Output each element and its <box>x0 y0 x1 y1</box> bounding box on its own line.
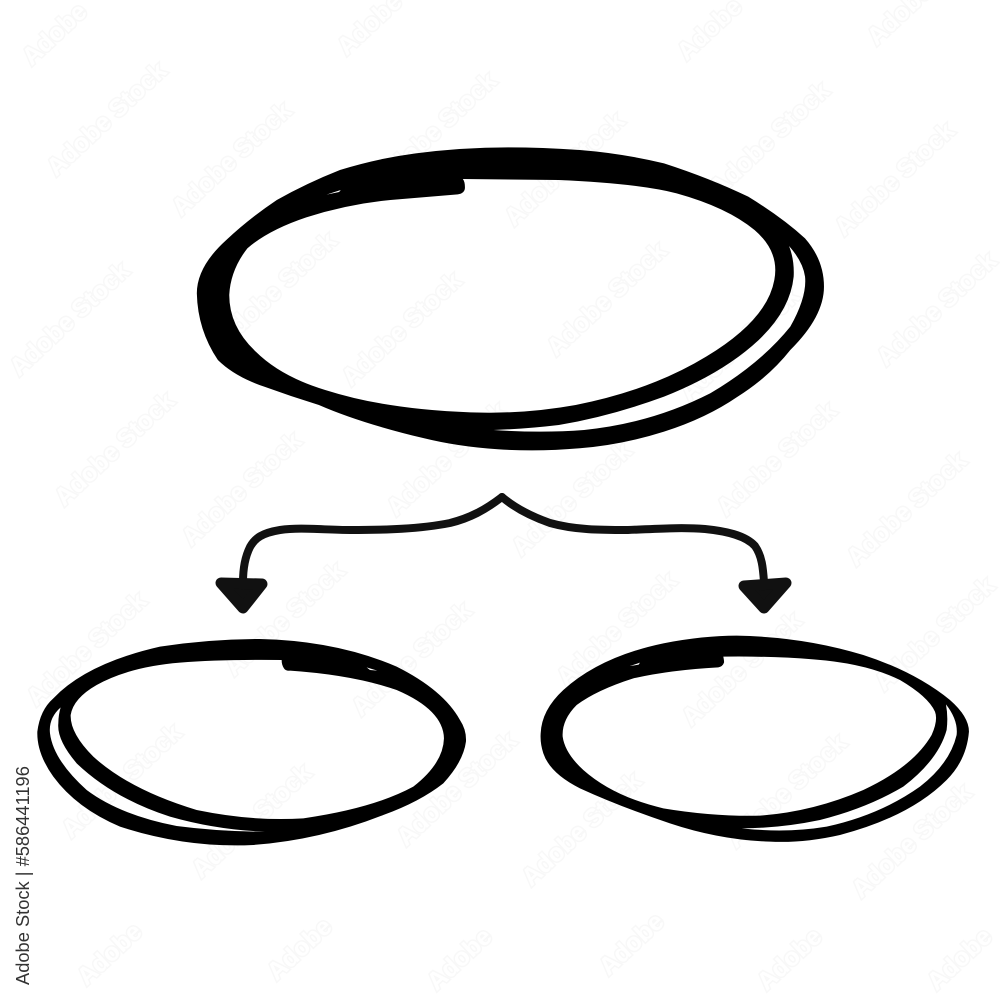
watermark text: Adobe Stock <box>381 397 512 521</box>
watermark text: Adobe Stock <box>704 77 835 201</box>
watermark text: Adobe Stock <box>336 267 467 391</box>
watermark text: Adobe Stock <box>846 779 977 903</box>
watermark text: Adobe Stock <box>674 282 805 406</box>
watermark text: Adobe <box>594 907 670 981</box>
watermark text: Adobe Stock <box>56 719 187 843</box>
watermark text: Adobe Stock <box>841 447 972 571</box>
watermark text: Adobe Stock <box>721 729 852 853</box>
watermark text: Adobe <box>262 912 338 986</box>
watermark text: Adobe Stock <box>49 387 180 511</box>
watermark text: Adobe Stock <box>541 237 672 361</box>
watermark text: Adobe Stock <box>219 557 350 681</box>
watermark text: Adobe Stock <box>869 572 1000 696</box>
arrowhead: right <box>744 583 786 608</box>
watermark text: Adobe Stock <box>371 67 502 191</box>
right arrow line <box>502 497 764 582</box>
watermark text: Adobe Stock <box>711 397 842 521</box>
branching arrow <box>221 497 786 608</box>
watermark text: Adobe Stock <box>391 727 522 851</box>
top oval <box>197 147 824 450</box>
watermark text: Adobe Stock <box>829 117 960 241</box>
left arrow line <box>243 497 502 582</box>
watermark text: Adobe Stock <box>186 759 317 883</box>
watermark text: Adobe Stock <box>676 607 807 731</box>
watermark text: Adobe Stock <box>4 257 135 381</box>
arrowhead: left <box>221 583 262 608</box>
watermark text: Adobe <box>922 922 998 996</box>
watermark text: Adobe Stock <box>551 567 682 691</box>
watermark text: Adobe Stock <box>506 437 637 561</box>
watermark text: Adobe Stock <box>166 97 297 221</box>
watermark text: Adobe Stock <box>499 107 630 231</box>
watermark text: Adobe Stock <box>211 227 342 351</box>
watermark text: Adobe Stock <box>176 427 307 551</box>
watermark text: Adobe <box>422 922 498 996</box>
bottom left oval <box>37 639 466 845</box>
bottom right oval <box>541 636 969 842</box>
vertical stock id: Adobe Stock | #586441196 <box>12 766 33 985</box>
watermark text: Adobe Stock <box>21 587 152 711</box>
watermark text: Adobe Stock <box>516 767 647 891</box>
watermark text: Adobe Stock <box>346 597 477 721</box>
watermark text: Adobe <box>72 917 148 991</box>
watermark text: Adobe <box>752 922 828 996</box>
watermark text: Adobe Stock <box>41 57 172 181</box>
watermark text: Adobe Stock <box>871 247 1000 371</box>
